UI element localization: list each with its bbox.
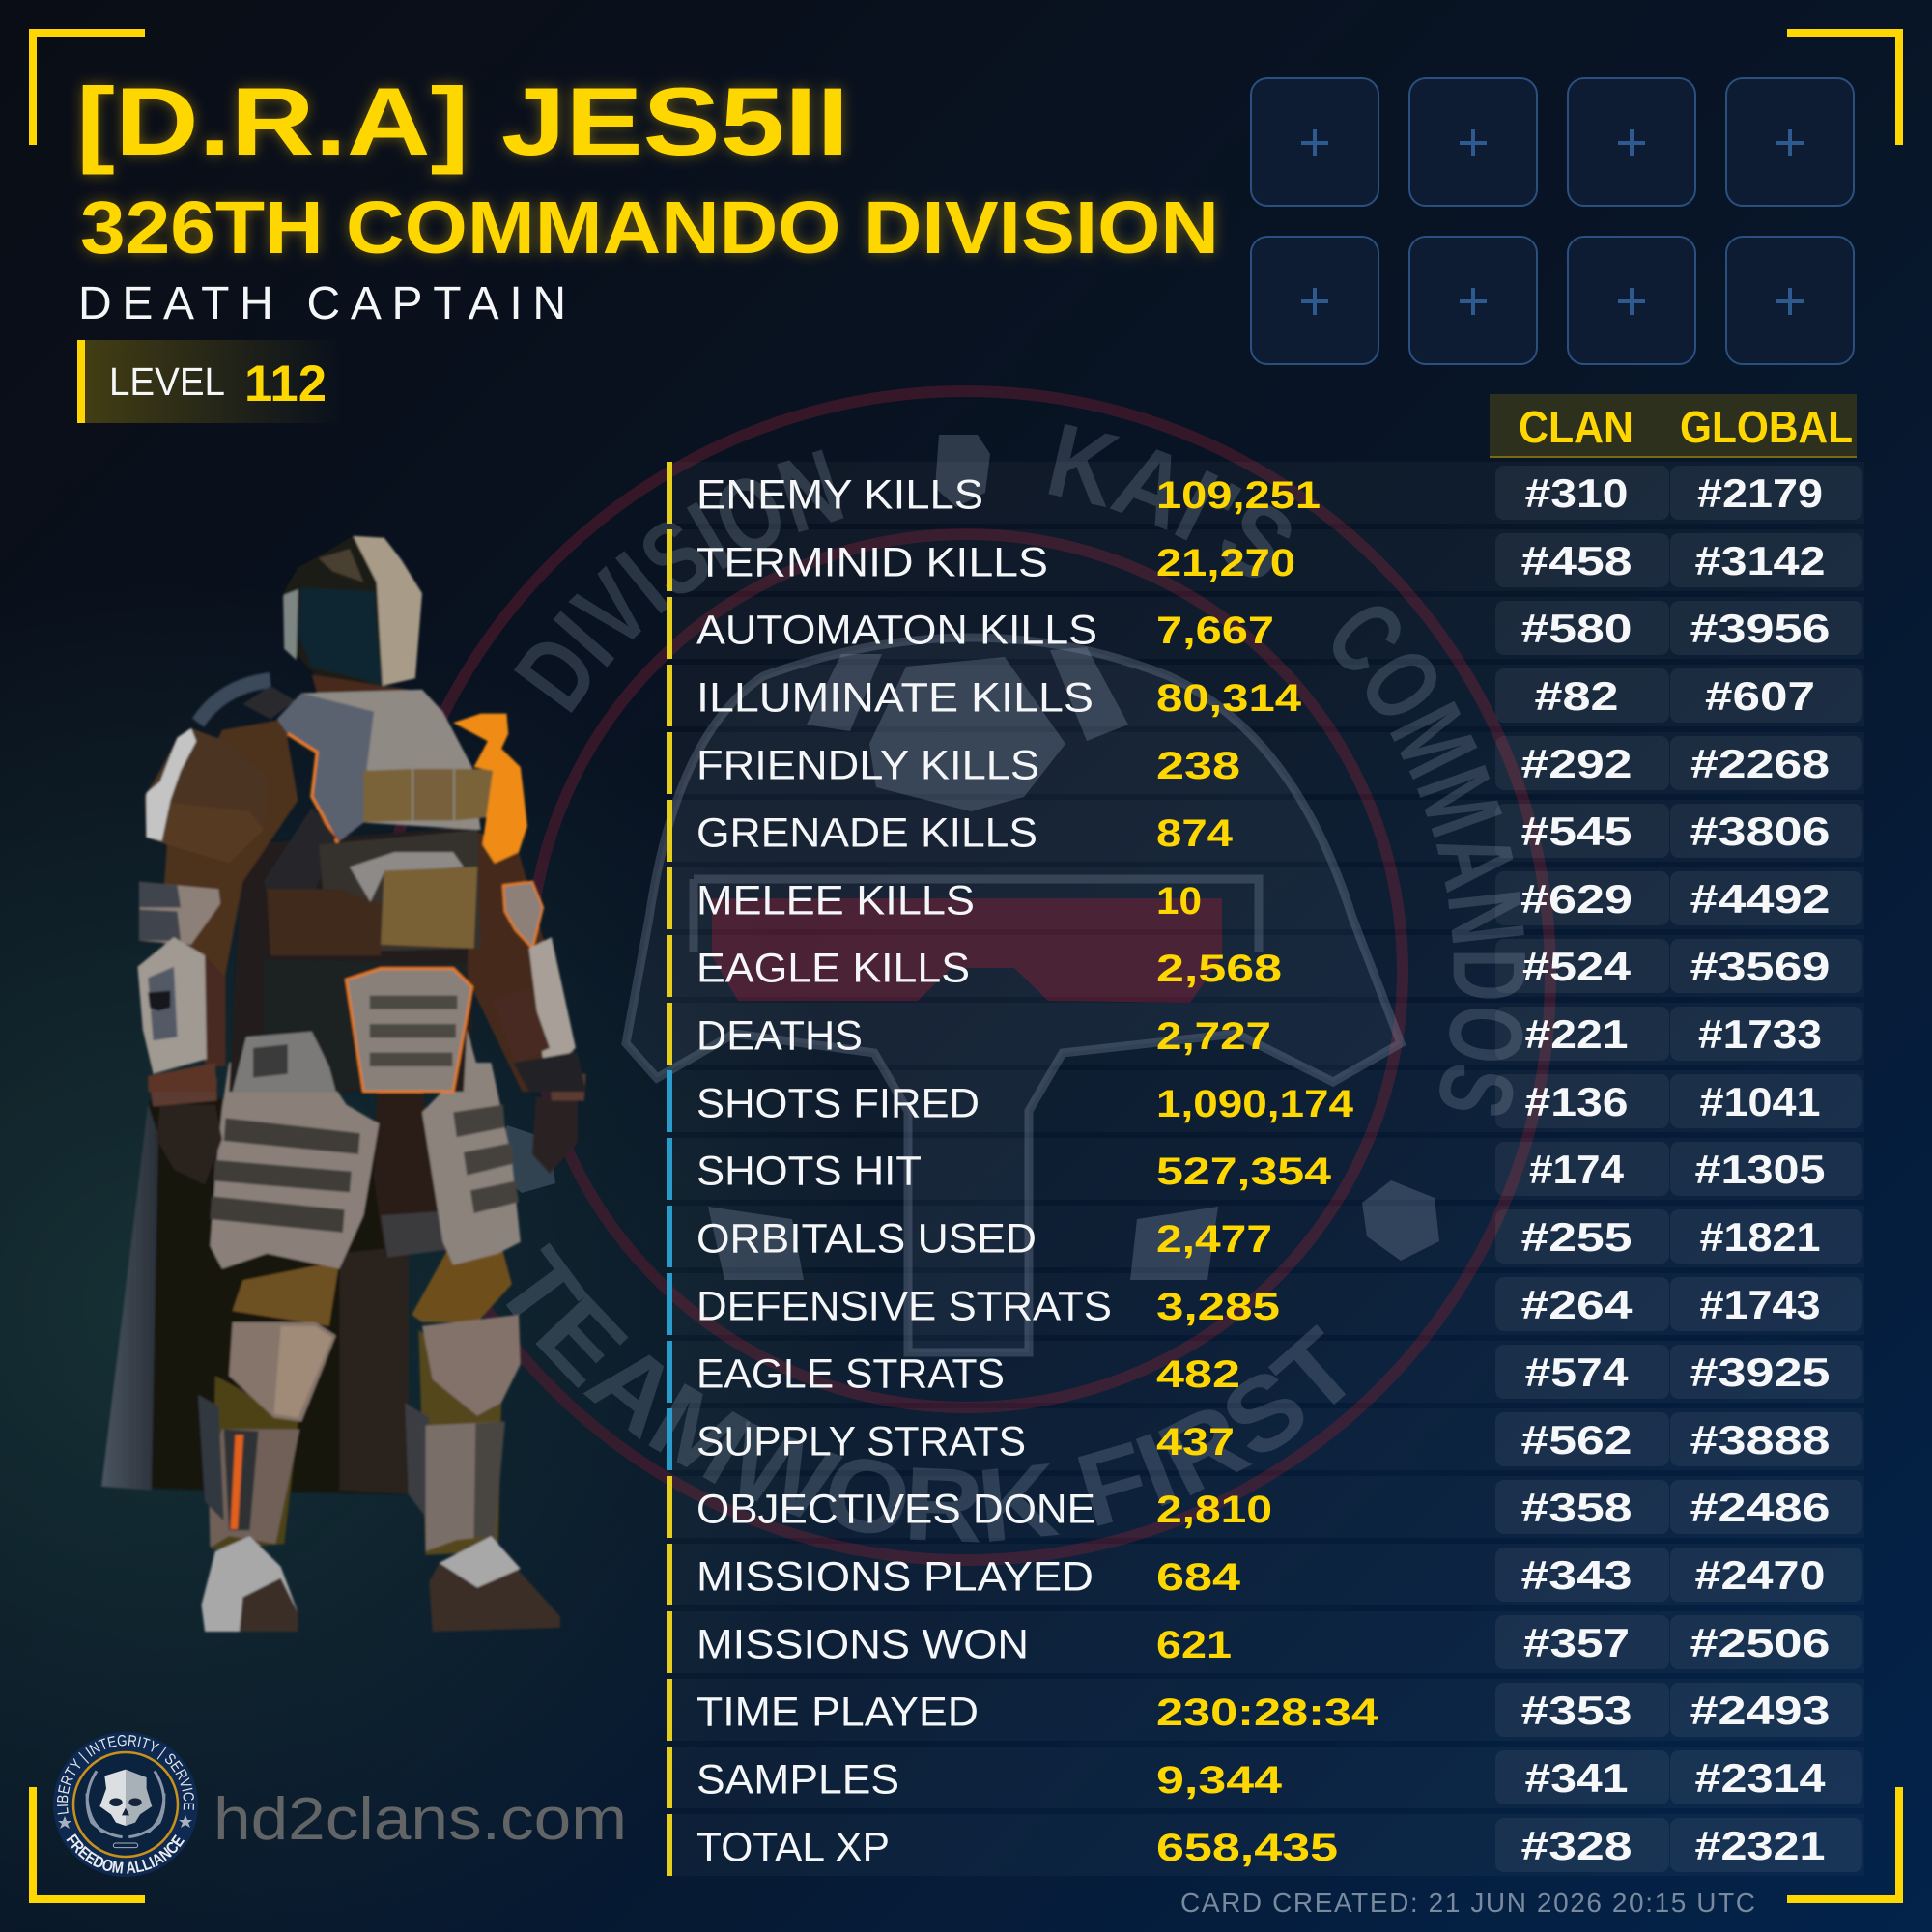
row: missions won: 621 — [1156, 1624, 1232, 1666]
row: total xp — [667, 1814, 1864, 1876]
slot 8 — [1726, 237, 1854, 364]
row: time played: #353 — [1520, 1688, 1633, 1733]
corner bracket: top right — [1787, 29, 1903, 145]
clan emblem watermark: KAI'S — [1049, 424, 1291, 578]
row: eagle strats — [667, 1341, 1864, 1403]
clan emblem watermark: COMMANDOS — [1333, 607, 1525, 1115]
row: friendly kills: #2268 — [1690, 741, 1830, 786]
row: objectives done: OBJECTIVES DONE — [696, 1486, 1095, 1532]
row: shots hit: #174 — [1529, 1147, 1625, 1192]
row: illuminate kills: 80,314 — [1156, 677, 1302, 720]
slot 3 — [1568, 78, 1695, 206]
row: enemy kills: #310 — [1524, 470, 1629, 516]
row: missions won: MISSIONS WON — [696, 1621, 1029, 1667]
row: total xp: 658,435 — [1156, 1827, 1338, 1869]
row: objectives done — [667, 1476, 1864, 1538]
row: terminid kills: TERMINID KILLS — [696, 539, 1048, 585]
row: friendly kills: FRIENDLY KILLS — [696, 742, 1039, 788]
row: defensive strats — [667, 1273, 1864, 1335]
row: time played: 230:28:34 — [1156, 1691, 1379, 1734]
row: time played — [667, 1679, 1864, 1741]
clan emblem watermark: TEAMWORK FIRST — [506, 1242, 1346, 1542]
row: missions played: MISSIONS PLAYED — [696, 1553, 1094, 1600]
row: time played: #2493 — [1690, 1688, 1830, 1733]
row: terminid kills — [667, 529, 1864, 591]
slot 2 — [1409, 78, 1537, 206]
row: illuminate kills: #82 — [1534, 673, 1619, 719]
logo: freedom alliance badge — [53, 1732, 198, 1877]
row: eagle strats: #574 — [1524, 1350, 1629, 1395]
row: shots hit — [667, 1138, 1864, 1200]
clan emblem watermark — [393, 385, 1556, 1566]
row: melee kills: MELEE KILLS — [696, 877, 975, 923]
row: shots fired: 1,090,174 — [1156, 1083, 1354, 1125]
badge stars — [58, 1815, 192, 1829]
row: shots hit: SHOTS HIT — [696, 1148, 922, 1194]
row: grenade kills: #545 — [1520, 809, 1633, 854]
row: automaton kills: #3956 — [1690, 606, 1830, 651]
row: objectives done: #2486 — [1690, 1485, 1830, 1530]
row: illuminate kills: ILLUMINATE KILLS — [696, 674, 1094, 721]
row: friendly kills — [667, 732, 1864, 794]
row: deaths — [667, 1003, 1864, 1065]
row: missions won: #2506 — [1690, 1620, 1830, 1665]
row: grenade kills: GRENADE KILLS — [696, 810, 1037, 856]
row: deaths: DEATHS — [696, 1012, 863, 1059]
row: defensive strats: DEFENSIVE STRATS — [696, 1283, 1112, 1329]
row: time played: TIME PLAYED — [696, 1689, 979, 1735]
table column headers — [1490, 394, 1857, 458]
slot 7 — [1568, 237, 1695, 364]
row: friendly kills: #292 — [1520, 741, 1633, 786]
row: supply strats: #3888 — [1690, 1417, 1830, 1463]
row: samples: #341 — [1524, 1755, 1629, 1801]
row: automaton kills: 7,667 — [1156, 610, 1274, 652]
empty medal slots — [1251, 78, 1854, 364]
row: automaton kills: #580 — [1520, 606, 1633, 651]
slot 4 — [1726, 78, 1854, 206]
row: orbitals used: #255 — [1520, 1214, 1633, 1260]
soldier lower body — [101, 1063, 586, 1632]
row: automaton kills — [667, 597, 1864, 659]
badge bottom text: FREEDOM ALLIANCE — [66, 1833, 185, 1874]
row: automaton kills: AUTOMATON KILLS — [696, 607, 1097, 653]
row: total xp: TOTAL XP — [696, 1824, 890, 1870]
row: deaths: 2,727 — [1156, 1015, 1271, 1058]
row: orbitals used: ORBITALS USED — [696, 1215, 1037, 1262]
row: enemy kills: 109,251 — [1156, 474, 1321, 517]
soldier figure — [101, 536, 586, 1632]
row: melee kills: 10 — [1156, 880, 1202, 923]
row: defensive strats: #1743 — [1700, 1282, 1820, 1327]
row: melee kills: #4492 — [1690, 876, 1830, 922]
row: grenade kills — [667, 800, 1864, 862]
row: terminid kills: #3142 — [1694, 538, 1826, 583]
footer: card created timestamp: CARD CREATED: 21 JUN 2026 20:15 UTC — [1180, 1888, 1755, 1918]
stats table — [667, 462, 1864, 1876]
row: defensive strats: 3,285 — [1156, 1286, 1280, 1328]
row: shots fired: #1041 — [1700, 1079, 1820, 1124]
title: player name: [D.R.A] JES5II — [76, 68, 849, 175]
row: illuminate kills — [667, 665, 1864, 726]
row: eagle kills: 2,568 — [1156, 948, 1282, 990]
level badge: 112 — [244, 355, 327, 412]
slot 1 — [1251, 78, 1378, 206]
row: shots hit: 527,354 — [1156, 1151, 1332, 1193]
row: samples: #2314 — [1694, 1755, 1826, 1801]
watermark: site name: hd2clans.com — [213, 1786, 627, 1853]
row: terminid kills: 21,270 — [1156, 542, 1295, 584]
row: supply strats: 437 — [1156, 1421, 1235, 1463]
row: eagle kills: #3569 — [1690, 944, 1830, 989]
corner bracket: top left — [29, 29, 145, 145]
badge top text: LIBERTY | INTEGRITY | SERVICE — [57, 1735, 195, 1814]
row: supply strats — [667, 1408, 1864, 1470]
column heading: global: GLOBAL — [1680, 402, 1853, 452]
soldier upper body — [137, 536, 586, 1092]
heading: division: 326TH COMMANDO DIVISION — [80, 186, 1219, 270]
row: melee kills — [667, 867, 1864, 929]
row: supply strats: SUPPLY STRATS — [696, 1418, 1026, 1464]
row: eagle strats: EAGLE STRATS — [696, 1350, 1005, 1397]
row: missions played: 684 — [1156, 1556, 1241, 1599]
row: objectives done: #358 — [1520, 1485, 1633, 1530]
row: defensive strats: #264 — [1520, 1282, 1633, 1327]
row: shots fired: SHOTS FIRED — [696, 1080, 980, 1126]
row: grenade kills: 874 — [1156, 812, 1234, 855]
row: eagle strats: 482 — [1156, 1353, 1240, 1396]
subtitle: rank: DEATH CAPTAIN — [78, 278, 566, 329]
row: enemy kills — [667, 462, 1864, 524]
row: eagle strats: #3925 — [1690, 1350, 1830, 1395]
row: total xp: #328 — [1520, 1823, 1633, 1868]
row: samples: 9,344 — [1156, 1759, 1283, 1802]
row: samples: SAMPLES — [696, 1756, 899, 1803]
row: deaths: #221 — [1524, 1011, 1629, 1057]
row: melee kills: #629 — [1520, 876, 1633, 922]
row: eagle kills: EAGLE KILLS — [696, 945, 970, 991]
row: orbitals used: #1821 — [1700, 1214, 1820, 1260]
row: missions played: #2470 — [1694, 1552, 1826, 1598]
clan emblem watermark: DIVISION — [514, 450, 844, 713]
row: enemy kills: ENEMY KILLS — [696, 471, 983, 518]
row: shots fired — [667, 1070, 1864, 1132]
row: eagle kills: #524 — [1522, 944, 1632, 989]
row: terminid kills: #458 — [1520, 538, 1633, 583]
row: friendly kills: 238 — [1156, 745, 1240, 787]
row: illuminate kills: #607 — [1705, 673, 1815, 719]
slot 5 — [1251, 237, 1378, 364]
row: enemy kills: #2179 — [1697, 470, 1823, 516]
row: samples — [667, 1747, 1864, 1808]
row: eagle kills — [667, 935, 1864, 997]
row: shots hit: #1305 — [1694, 1147, 1826, 1192]
row: missions played: #343 — [1520, 1552, 1633, 1598]
corner bracket: bottom right — [1787, 1787, 1903, 1903]
row: total xp: #2321 — [1694, 1823, 1826, 1868]
corner bracket: bottom left — [29, 1787, 145, 1903]
row: grenade kills: #3806 — [1690, 809, 1830, 854]
row: shots fired: #136 — [1524, 1079, 1629, 1124]
row: missions won: #357 — [1523, 1620, 1630, 1665]
level badge: LEVEL — [109, 359, 225, 404]
slot 6 — [1409, 237, 1537, 364]
row: orbitals used — [667, 1206, 1864, 1267]
row: deaths: #1733 — [1698, 1011, 1822, 1057]
level badge — [77, 340, 342, 423]
column heading: clan: CLAN — [1519, 402, 1634, 452]
row: missions won — [667, 1611, 1864, 1673]
badge skull — [87, 1770, 164, 1848]
row: missions played — [667, 1544, 1864, 1605]
row: orbitals used: 2,477 — [1156, 1218, 1272, 1261]
row: objectives done: 2,810 — [1156, 1489, 1272, 1531]
row: supply strats: #562 — [1520, 1417, 1633, 1463]
